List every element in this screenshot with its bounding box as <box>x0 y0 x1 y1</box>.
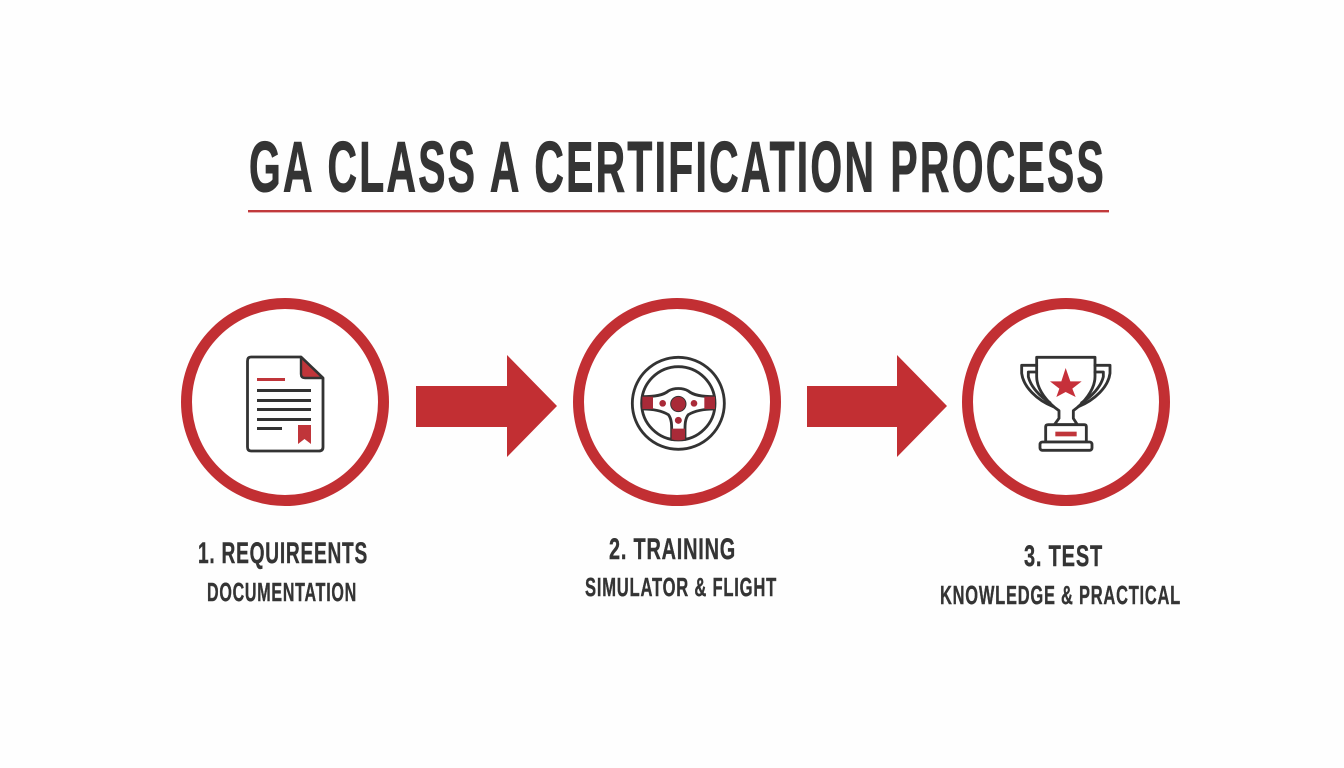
step 3 circle <box>968 304 1164 500</box>
step 1 label: 1. REQUIREENTS <box>198 537 368 570</box>
arrow 1 <box>416 355 557 457</box>
step 2 label: SIMULATOR & FLIGHT <box>585 572 777 602</box>
step 1 label <box>198 537 368 607</box>
arrow 2 <box>807 355 947 457</box>
icon: trophy <box>1022 357 1110 450</box>
step 2 label: 2. TRAINING <box>609 533 736 566</box>
step 2 circle <box>578 304 776 500</box>
icon: steering wheel <box>632 357 724 449</box>
step 2 label <box>585 533 777 602</box>
icon: document <box>248 357 323 451</box>
step 1 label: DOCUMENTATION <box>207 577 357 607</box>
step 3 label: 3. TEST <box>1024 540 1103 573</box>
step 3 label <box>940 540 1181 610</box>
title underline <box>248 210 1109 212</box>
step 3 label: KNOWLEDGE & PRACTICAL <box>940 580 1181 610</box>
step 1 circle <box>186 304 384 500</box>
